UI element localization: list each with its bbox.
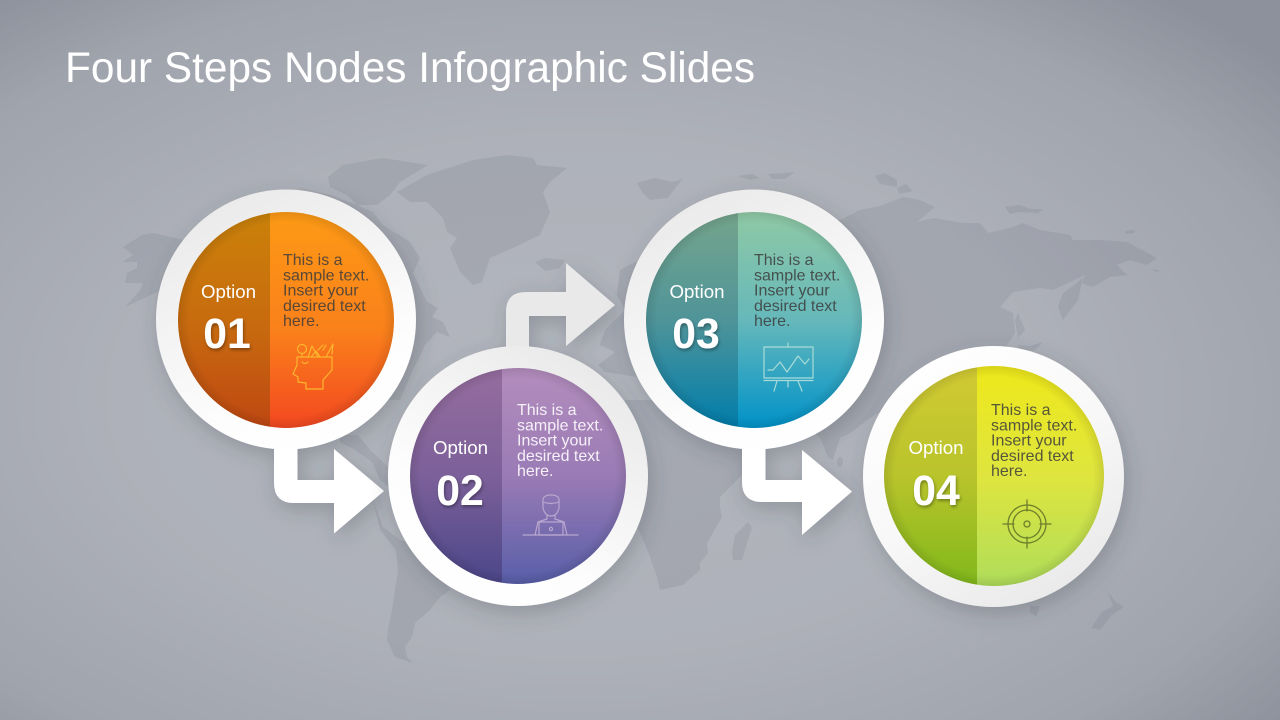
text block 04: here. xyxy=(991,463,1027,480)
number 01: 01 xyxy=(203,310,251,358)
label: option 03: Option xyxy=(669,281,725,302)
label: option 04: Option xyxy=(908,437,964,458)
text block 01: This is a xyxy=(283,252,343,269)
text block 03: sample text. xyxy=(754,267,840,284)
number 04: 04 xyxy=(912,467,960,515)
text block 01: sample text. xyxy=(283,267,369,284)
text block 01: Insert your xyxy=(283,283,359,300)
text block 02: Insert your xyxy=(517,433,593,450)
label: option 02: Option xyxy=(433,437,488,458)
disc: orange xyxy=(178,212,394,428)
label: option 01: Option xyxy=(201,281,256,302)
disc: lime xyxy=(884,366,1104,586)
world map xyxy=(122,155,1161,663)
node: option 01 xyxy=(156,190,416,534)
ring 4 xyxy=(863,346,1124,607)
text block 04: Insert your xyxy=(991,433,1067,450)
text block 04: desired text xyxy=(991,448,1074,465)
text block 03: Insert your xyxy=(754,283,830,300)
number 02: 02 xyxy=(436,467,484,515)
text block 03: here. xyxy=(754,313,790,330)
icon: head with ideas xyxy=(293,344,333,389)
text block 02: sample text. xyxy=(517,417,603,434)
node: option 03 xyxy=(624,190,884,535)
node: option 04 xyxy=(863,346,1124,607)
icon: target xyxy=(1003,500,1051,548)
title: Four Steps Nodes Infographic Slides xyxy=(65,44,755,92)
icon: person at laptop xyxy=(523,495,578,535)
text block 02: desired text xyxy=(517,448,600,465)
text block 03: This is a xyxy=(754,252,814,269)
text block 03: desired text xyxy=(754,298,837,315)
text block 01: desired text xyxy=(283,298,366,315)
text block 01: here. xyxy=(283,313,319,330)
text block 02: here. xyxy=(517,463,553,480)
text block 04: sample text. xyxy=(991,417,1077,434)
text block 04: This is a xyxy=(991,402,1051,419)
ring and arrow 3 xyxy=(624,190,884,535)
text block 02: This is a xyxy=(517,402,577,419)
ring and arrow 1 xyxy=(156,190,416,534)
icon: chart board xyxy=(764,343,813,391)
disc: purple xyxy=(410,368,626,584)
ring and arrow 2 xyxy=(388,263,648,606)
number 03: 03 xyxy=(672,310,720,358)
node: option 02 xyxy=(388,263,648,606)
disc: teal xyxy=(646,212,862,428)
